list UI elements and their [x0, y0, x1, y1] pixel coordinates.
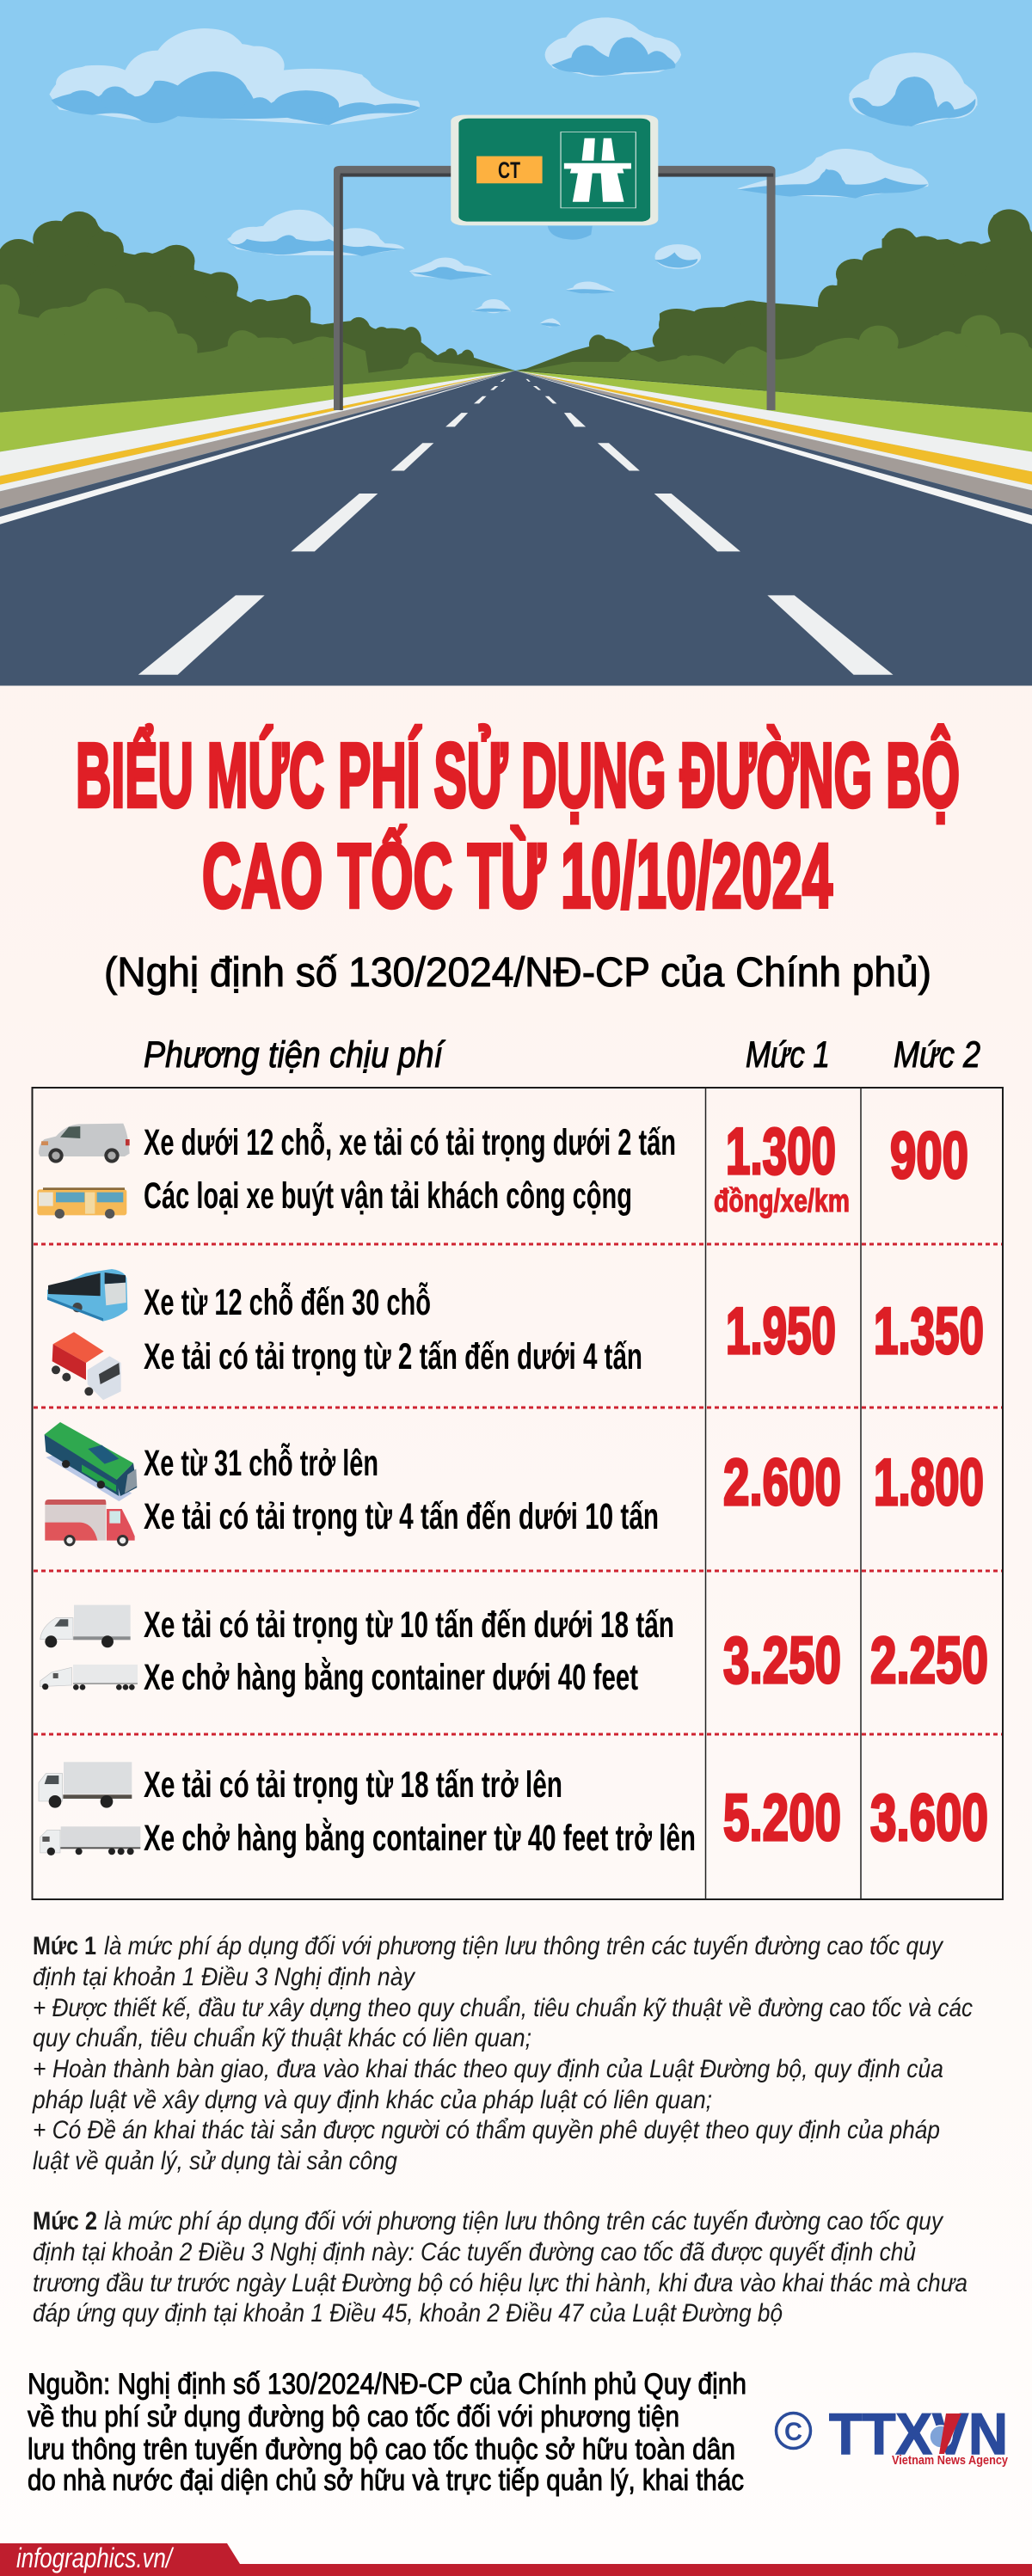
- note: Mức 1: luật về quản lý, sử dụng tài sản công: [33, 2147, 397, 2175]
- note: Mức 2: là mức phí áp dụng đối với phương tiện lưu thông trên các tuyến đường cao tốc quy: [104, 2207, 944, 2236]
- note: Mức 2: Mức 2: [33, 2207, 97, 2236]
- source text: do nhà nước đại diện chủ sở hữu và trực tiếp quản lý, khai thác: [28, 2464, 744, 2497]
- row 4: Xe chở hàng bằng container dưới 40 feet: [144, 1656, 638, 1698]
- row 3: Xe từ 31 chỗ trở lên: [144, 1442, 378, 1484]
- row 4: 3.250: [723, 1624, 841, 1697]
- gantry frame: [334, 166, 776, 410]
- title: [76, 725, 960, 927]
- icon: white canvas truck: [40, 1605, 131, 1647]
- footer bar: [0, 2542, 1032, 2576]
- row 5: Xe chở hàng bằng container từ 40 feet trở lên: [144, 1817, 696, 1859]
- hero illustration: highway with gantry sign: [0, 0, 1032, 685]
- footer bar: infographics.vn/: [16, 2542, 175, 2573]
- logo: TTXVN Vietnam News Agency: TTXVN: [829, 2401, 1008, 2467]
- note: Mức 2: [33, 2207, 968, 2328]
- source text: [28, 2368, 746, 2497]
- note: Mức 1: [32, 1932, 973, 2175]
- icon: white container rig: [40, 1665, 138, 1690]
- subtitle: (Nghị định số 130/2024/NĐ-CP của Chính phủ): [104, 950, 931, 996]
- table header: Phương tiện chịu phí: [144, 1034, 446, 1076]
- icon: red container truck: [52, 1332, 121, 1400]
- row 1: Các loại xe buýt vận tải khách công cộng: [144, 1175, 632, 1217]
- row 5: Xe tải có tải trọng từ 18 tấn trở lên: [144, 1764, 562, 1806]
- source text: Nguồn: Nghị định số 130/2024/NĐ-CP của Chính phủ Quy định: [28, 2368, 746, 2401]
- icon: clouds: [49, 17, 977, 328]
- row 2: [47, 1269, 984, 1400]
- row 3: 2.600: [723, 1446, 841, 1519]
- row 1: Xe dưới 12 chỗ, xe tải có tải trọng dưới 2 tấn: [144, 1121, 676, 1163]
- table header: Mức 2: [894, 1034, 980, 1076]
- icon: long container rig: [40, 1826, 140, 1855]
- note: Mức 1: quy chuẩn, tiêu chuẩn kỹ thuật khác có liên quan;: [33, 2024, 531, 2052]
- table header: [144, 1034, 980, 1076]
- icon: red box truck: [45, 1500, 135, 1546]
- row 1: [37, 1115, 968, 1218]
- row 4: 2.250: [870, 1624, 988, 1697]
- table header: Mức 1: [746, 1034, 830, 1076]
- row 2: Xe từ 12 chỗ đến 30 chỗ: [144, 1281, 431, 1323]
- lane markings: [138, 379, 894, 675]
- row 5: 5.200: [723, 1782, 841, 1855]
- icon: silver van: [39, 1124, 130, 1163]
- roadside strips: [0, 371, 1032, 509]
- hero illustration: highway with gantry sign: CT: [498, 157, 520, 183]
- source text: lưu thông trên tuyến đường bộ cao tốc thuộc sở hữu toàn dân: [28, 2433, 735, 2466]
- row 5: 3.600: [870, 1782, 988, 1855]
- row 1: đồng/xe/km: [714, 1183, 850, 1218]
- note: Mức 1: Mức 1: [33, 1932, 96, 1960]
- row 1: 1.300: [726, 1115, 836, 1188]
- note: Mức 1: pháp luật về xây dựng và quy định khác của pháp luật có liên quan;: [32, 2086, 712, 2114]
- note: Mức 2: đáp ứng quy định tại khoản 1 Điều 45, khoản 2 Điều 47 của Luật Đường bộ: [33, 2299, 783, 2328]
- icon: large box truck: [39, 1762, 132, 1808]
- icon: green bus: [45, 1422, 137, 1501]
- road surface: [0, 371, 1032, 685]
- row 4: Xe tải có tải trọng từ 10 tấn đến dưới 18 tấn: [144, 1604, 674, 1646]
- trees: [0, 209, 1032, 413]
- note: Mức 1: là mức phí áp dụng đối với phương tiện lưu thông trên các tuyến đường cao tốc quy: [104, 1932, 944, 1960]
- icon: blue coach: [47, 1269, 127, 1322]
- row 3: [45, 1422, 984, 1546]
- icon: yellow city bus: [37, 1187, 126, 1218]
- row 1: 900: [890, 1119, 968, 1193]
- note: Mức 1: định tại khoản 1 Điều 3 Nghị định này: [33, 1963, 416, 1991]
- row 4: [40, 1604, 988, 1698]
- row 2: Xe tải có tải trọng từ 2 tấn đến dưới 4 tấn: [144, 1336, 642, 1377]
- logo: TTXVN Vietnam News Agency: C: [784, 2418, 802, 2446]
- fee table: [33, 1088, 1003, 1899]
- highway sign board: [451, 115, 658, 225]
- source text: về thu phí sử dụng đường bộ cao tốc đối với phương tiện: [28, 2401, 679, 2433]
- logo: TTXVN Vietnam News Agency: Vietnam News Agency: [892, 2453, 1009, 2468]
- row 5: [39, 1762, 988, 1859]
- row 3: Xe tải có tải trọng từ 4 tấn đến dưới 10 tấn: [144, 1496, 659, 1537]
- row 2: 1.950: [726, 1295, 836, 1368]
- note: Mức 2: định tại khoản 2 Điều 3 Nghị định này: Các tuyến đường cao tốc đã được quyết định chủ: [33, 2238, 916, 2266]
